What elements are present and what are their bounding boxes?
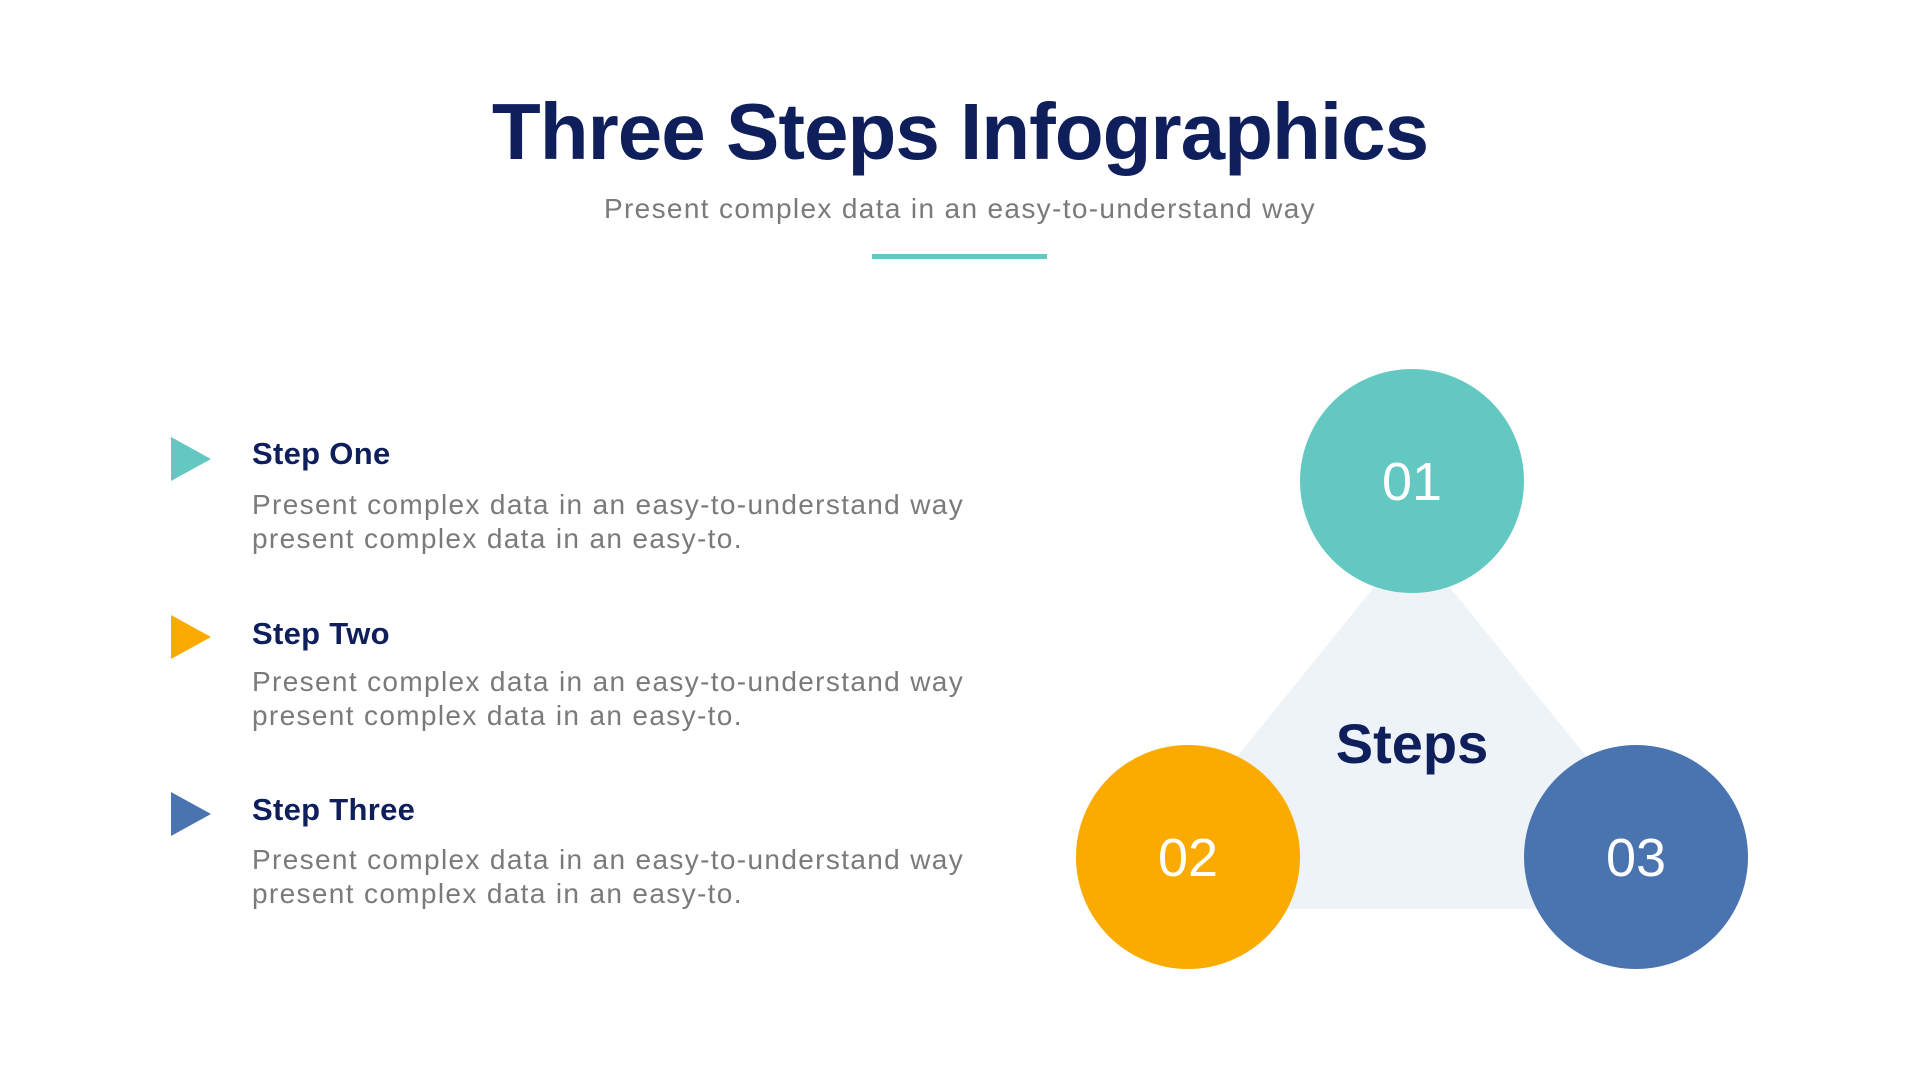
circle 01: 01 — [1382, 452, 1442, 512]
step one — [171, 436, 964, 554]
title: Three Steps Infographics — [492, 87, 1428, 176]
text: step three: Present complex data in an easy-to-understand way — [252, 844, 964, 875]
text: step two: Present complex data in an easy-to-understand way — [252, 666, 964, 697]
step two — [171, 615, 964, 731]
icon: orange triangle — [171, 615, 211, 659]
text: step three — [252, 844, 964, 909]
circle 01 — [1300, 369, 1524, 593]
text: step two: present complex data in an easy-to. — [252, 700, 743, 731]
heading: step two: Step Two — [252, 616, 390, 651]
underline accent — [872, 254, 1047, 259]
label: steps: Steps — [1336, 712, 1488, 775]
text: step one: Present complex data in an easy-to-understand way — [252, 489, 964, 520]
text: step two — [252, 666, 964, 731]
icon: teal triangle — [171, 437, 211, 481]
heading: step one: Step One — [252, 436, 390, 471]
circle 03: 03 — [1606, 828, 1666, 888]
step three — [171, 792, 964, 909]
background triangle — [1114, 540, 1709, 909]
text: step three: present complex data in an easy-to. — [252, 878, 743, 909]
circle 02 — [1076, 745, 1300, 969]
text: step one: present complex data in an easy-to. — [252, 523, 743, 554]
circle 02: 02 — [1158, 828, 1218, 888]
icon: blue triangle — [171, 792, 211, 836]
subtitle: Present complex data in an easy-to-understand way — [604, 193, 1316, 224]
text: step one — [252, 489, 964, 554]
circle 03 — [1524, 745, 1748, 969]
heading: step three: Step Three — [252, 792, 415, 827]
